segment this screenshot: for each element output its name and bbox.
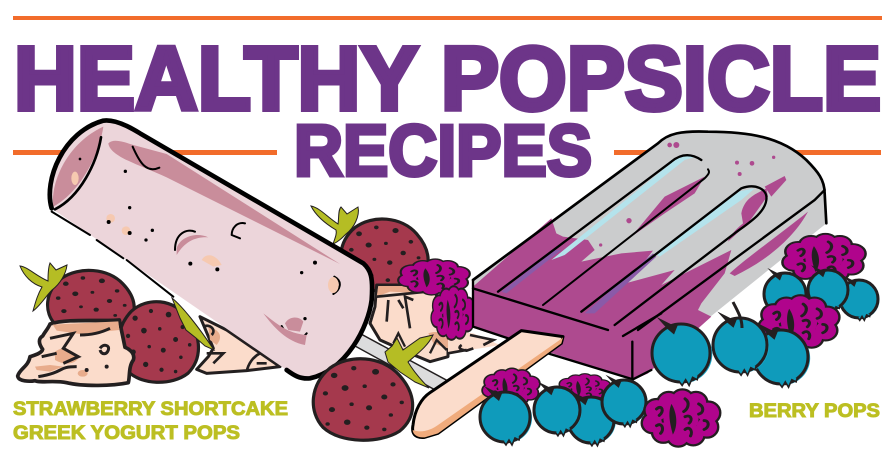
- strawberry: back right: [311, 206, 428, 291]
- front face: [473, 288, 648, 380]
- cake crumbs under the popsicle: [448, 330, 500, 353]
- top orange rule: [13, 16, 882, 20]
- blueberries: right cluster: [764, 265, 880, 320]
- caption: strawberry shortcake: STRAWBERRY SHORTCAKE: [13, 398, 288, 420]
- wooden popsicle stick: [413, 331, 563, 437]
- popsicle end face: [53, 127, 103, 207]
- raspberry: right cluster front: [760, 296, 838, 348]
- strawberry: front left: [118, 298, 214, 382]
- berry popsicle: [473, 131, 826, 380]
- lower orange rules: [13, 150, 881, 155]
- groove highlights: [551, 155, 696, 260]
- strawberry: back left: [20, 263, 134, 336]
- caption: strawberry shortcake: GREEK YOGURT POPS: [13, 422, 240, 444]
- raspberries: right cluster back: [784, 235, 864, 281]
- title: [14, 30, 881, 192]
- cake piece: right: [370, 285, 448, 362]
- strawberry: front bottom: [313, 335, 433, 440]
- blueberries: beside popsicle: [652, 302, 810, 387]
- purple syrup on top face: [473, 218, 731, 380]
- caption: berry pops: BERRY POPS: [749, 400, 880, 422]
- cake piece: left: [18, 320, 134, 385]
- raspberry: bottom right: [643, 390, 719, 446]
- title: RECIPES: [294, 112, 592, 192]
- popsicle stains: [177, 235, 307, 345]
- left popsicle stick: [355, 334, 448, 397]
- cake piece: middle: [197, 317, 280, 373]
- popsicle outline: [50, 120, 372, 378]
- raspberry pair beside the left popsicle: [399, 260, 474, 339]
- popsicle linework: [473, 131, 826, 379]
- caption: strawberry shortcake: [13, 398, 288, 444]
- popsicle highlight: [108, 141, 340, 264]
- strawberry yogurt popsicle: [50, 120, 373, 378]
- raspberries: bottom cluster back: [483, 369, 610, 405]
- title: HEALTHY POPSICLE: [14, 30, 881, 130]
- shortcake pieces: [197, 285, 500, 373]
- syrup streaks: [599, 142, 808, 276]
- blueberries: bottom cluster: [480, 375, 648, 446]
